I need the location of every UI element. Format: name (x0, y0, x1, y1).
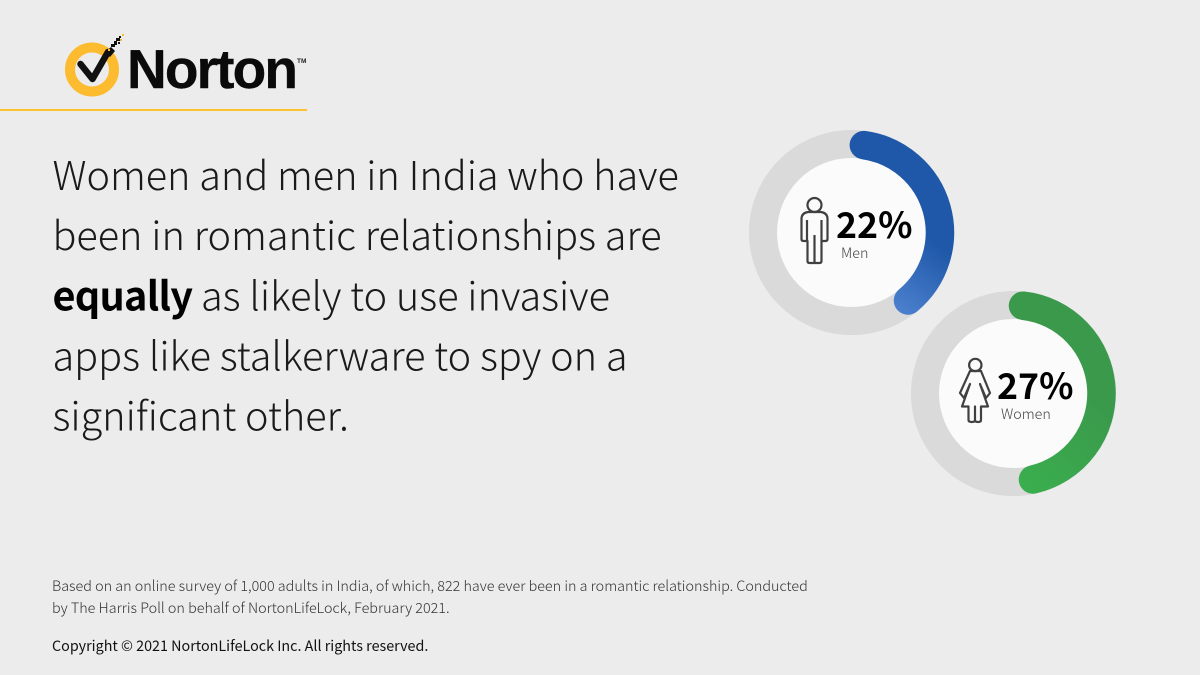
label: Women: Women (1001, 403, 1051, 424)
arc: men value (864, 145, 940, 300)
headline text: Women and men in India who have (52, 145, 679, 202)
icon: woman (960, 359, 990, 422)
wordmark: Norton (127, 38, 298, 100)
value: 27%: 27% (997, 359, 1073, 410)
label: Men: Men (841, 242, 868, 263)
footnote: survey source: Based on an online survey of 1,000 adults in India, of which, 822 have ever been in a romantic relationship. Conducted (52, 575, 808, 596)
icon: man (802, 198, 828, 263)
headline text: equally as likely to use invasive (52, 266, 610, 322)
donut chart: women 27% (925, 305, 1102, 482)
icon: Norton check ring (70, 34, 124, 92)
headline text: apps like stalkerware to spy on a (52, 326, 628, 382)
headline text: been in romantic relationships are (52, 205, 662, 262)
donut chart: men 22% (763, 144, 940, 321)
value: 22%: 22% (836, 198, 912, 249)
headline text (52, 145, 679, 442)
arc: women value (1023, 306, 1101, 480)
footnote: survey source (52, 575, 808, 618)
copyright: Copyright © 2021 NortonLifeLock Inc. All rights reserved. (52, 635, 428, 656)
trademark: TM (297, 58, 306, 65)
logo underline (0, 109, 307, 111)
headline text: significant other. (52, 386, 349, 442)
logo: Norton (70, 34, 306, 100)
footnote: survey source: by The Harris Poll on behalf of NortonLifeLock, February 2021. (52, 597, 450, 618)
